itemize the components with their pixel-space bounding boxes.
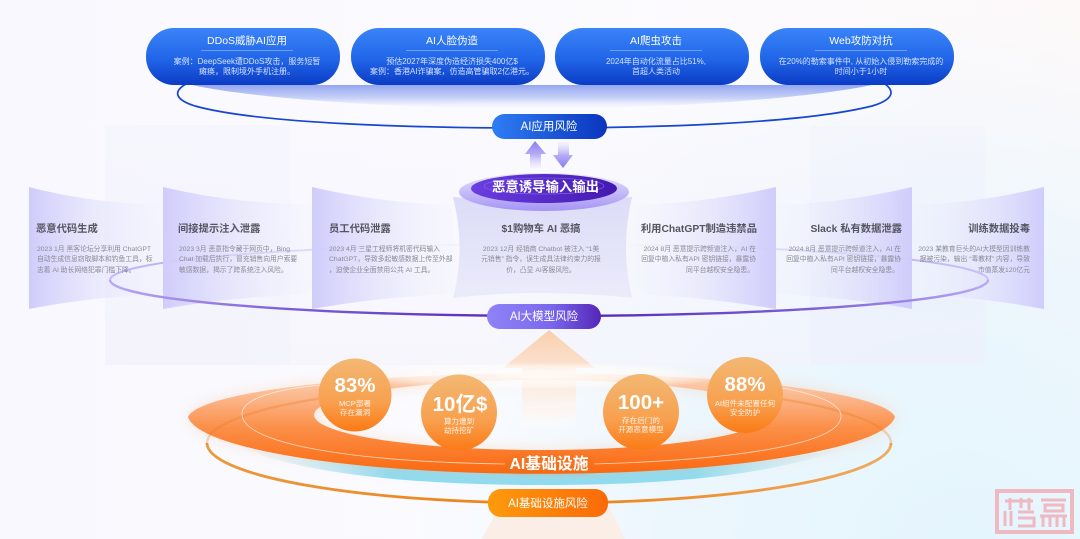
panel: ChatGPT contraband: 同平台越权安全隐患。 — [686, 265, 754, 274]
panel: ChatGPT contraband: 利用ChatGPT制造违禁品 — [641, 222, 757, 235]
orange ring far side — [206, 398, 892, 445]
panel: malicious code generation: 志着 AI 助长网络犯罪门槛下降。 — [37, 265, 136, 274]
panel: training data poisoning — [912, 187, 1044, 309]
watermark seal — [997, 491, 1072, 532]
panel: $1 car: 价，凸显 AI客服风险。 — [506, 265, 576, 274]
panel: ChatGPT contraband: 2024 8月 恶意提示跨频道注入，AI 在 — [643, 244, 756, 253]
panel: Slack data leak: 同平台越权安全隐患。 — [831, 265, 899, 274]
stat: 100+: 存在后门的 — [622, 415, 660, 425]
stat: 83%: 83% — [334, 374, 376, 397]
panel: training data poisoning: 训练数据投毒 — [968, 222, 1030, 235]
label: AI application risk — [492, 114, 607, 139]
panel: $1 car: $1购物车 AI 恶搞 — [502, 222, 580, 235]
card: crawler: 首超人类活动 — [632, 66, 680, 76]
panel: ChatGPT contraband — [635, 187, 776, 309]
panel: Slack data leak: Slack 私有数据泄露 — [810, 222, 903, 235]
stat: 88%: AI组件未配置任何 — [715, 398, 776, 408]
label: AI infrastructure risk: AI基础设施风险 — [508, 496, 588, 510]
panel: indirect prompt injection: 2023 3月 恶意指令藏于网页中，Bing — [179, 244, 290, 253]
panel: indirect prompt injection — [163, 187, 312, 309]
panel: malicious code generation: 恶意代码生成 — [36, 222, 98, 235]
stat: 1 billion dollars: 10亿$ — [433, 393, 488, 416]
purple ring far side — [110, 244, 988, 280]
section: AI application risk — [146, 28, 954, 139]
card: web attack defense: 时间小于1小时 — [835, 66, 887, 76]
card: crawler: 2024年自动化流量占比51%, — [606, 56, 706, 66]
stat: 100+: 开源恶意模型 — [618, 424, 664, 434]
cyan underglow — [235, 445, 850, 485]
blue ring — [178, 84, 891, 128]
panel: indirect prompt injection: Chat 加载后执行，冒充销售向用户索要 — [179, 254, 297, 263]
card: crawler: AI爬虫攻击 — [630, 34, 682, 47]
panel: training data poisoning: 据被污染，输出 “毒教材” 内容，导致 — [920, 254, 1030, 263]
label: AI model risk: AI大模型风险 — [510, 309, 579, 323]
panel: employee code leak — [312, 187, 453, 309]
panel: $1 car — [453, 197, 632, 298]
panel: indirect prompt injection: 间接提示注入泄露 — [178, 222, 261, 235]
card: DDoS: DDoS威胁AI应用 — [207, 34, 287, 47]
stat: 88% — [707, 357, 783, 433]
badge: malicious input output — [459, 173, 629, 211]
panel: training data poisoning: 2023 某教育巨头的AI大模型因训练教 — [918, 244, 1030, 253]
fade on far side of platform — [351, 362, 731, 390]
arrow: up — [525, 141, 546, 168]
panel: Slack data leak: 2024 8月 恶意提示跨频道注入，AI 在 — [788, 244, 901, 253]
stat: 1 billion dollars: 劫持挖矿 — [444, 425, 475, 435]
card: web attack defense: Web攻防对抗 — [829, 34, 893, 47]
orange ring near side — [207, 443, 891, 503]
stat: 83% — [318, 358, 392, 432]
panel: employee code leak: 2023 4月 三星工程师将机密代码输入 — [329, 244, 440, 253]
stat: 83%: MCP部署 — [339, 398, 371, 408]
stat: 88%: 安全防护 — [730, 407, 761, 417]
panel: Slack data leak — [776, 187, 912, 309]
panel: malicious code generation — [29, 187, 163, 309]
stat: 100+ — [603, 374, 679, 450]
panel: $1 car: 2023 12月 经销商 Chatbot 被注入 “1美 — [483, 244, 599, 253]
card: DDoS: 案例：DeepSeek遭DDoS攻击，服务短暂 — [174, 56, 320, 66]
card: face forgery: AI人脸伪造 — [426, 34, 478, 47]
orange glow — [188, 373, 895, 474]
panel: employee code leak: ChatGPT，导致多起敏感数据上传至外部 — [329, 254, 453, 263]
panel: malicious code generation: 2023 1月 黑客论坛分享利用 ChatGPT — [37, 244, 151, 253]
panel: Slack data leak: 回复中植入私有API 密钥链接，暴露协 — [786, 254, 901, 263]
big up arrow — [503, 330, 595, 430]
inner white line — [242, 385, 841, 464]
section: AI infrastructure risk — [188, 330, 895, 539]
card: face forgery: 预估2027年深度伪造经济损失400亿$ — [386, 56, 518, 66]
blue glow under pills — [192, 85, 872, 109]
stat: 83%: 存在漏洞 — [340, 407, 371, 417]
panel: training data poisoning: 市值蒸发120亿元 — [978, 265, 1030, 274]
stat: 1 billion dollars: 算力遭到 — [444, 416, 474, 426]
card: web attack defense: 在20%的勒索事件中, 从初始入侵到勒索完成的 — [779, 56, 943, 66]
panel: employee code leak: 员工代码泄露 — [329, 222, 391, 235]
panel: malicious code generation: 自动生成信息窃取脚本和钓鱼工具，标 — [37, 254, 153, 263]
panel: indirect prompt injection: 敏感数据，揭示了跨系统注入风险。 — [179, 265, 288, 274]
stat: 1 billion dollars — [421, 374, 497, 450]
card: face forgery: 案例：香港AI诈骗案，仿造高管骗取2亿港元。 — [370, 66, 534, 76]
panel: employee code leak: ，迫使企业全面禁用公共 AI 工具。 — [329, 265, 434, 274]
card: DDoS — [146, 28, 340, 85]
panel: ChatGPT contraband: 回复中植入私有API 密钥链接，暴露协 — [641, 254, 756, 263]
label: AI model risk — [487, 304, 601, 329]
card: crawler — [555, 28, 749, 85]
section: AI model risk — [29, 173, 1044, 329]
badge: malicious input output: 恶意诱导输入输出 — [492, 178, 599, 194]
stat: 100+: 100+ — [618, 391, 664, 414]
card: DDoS: 瘫痪，限制境外手机注册。 — [199, 66, 295, 76]
label: AI infrastructure risk — [488, 489, 608, 517]
stat: 88%: 88% — [724, 373, 766, 396]
card: face forgery — [351, 28, 545, 85]
card: web attack defense — [760, 28, 954, 85]
arrow: down — [553, 142, 573, 168]
orange platform — [188, 373, 895, 474]
platform title: AI基础设施 — [510, 455, 589, 473]
panel: $1 car: 元销售” 指令，误生成具法律约束力的报 — [481, 254, 601, 263]
lower arrow tail — [482, 505, 625, 539]
purple ring near side — [110, 280, 988, 316]
label: AI application risk: AI应用风险 — [521, 119, 578, 133]
